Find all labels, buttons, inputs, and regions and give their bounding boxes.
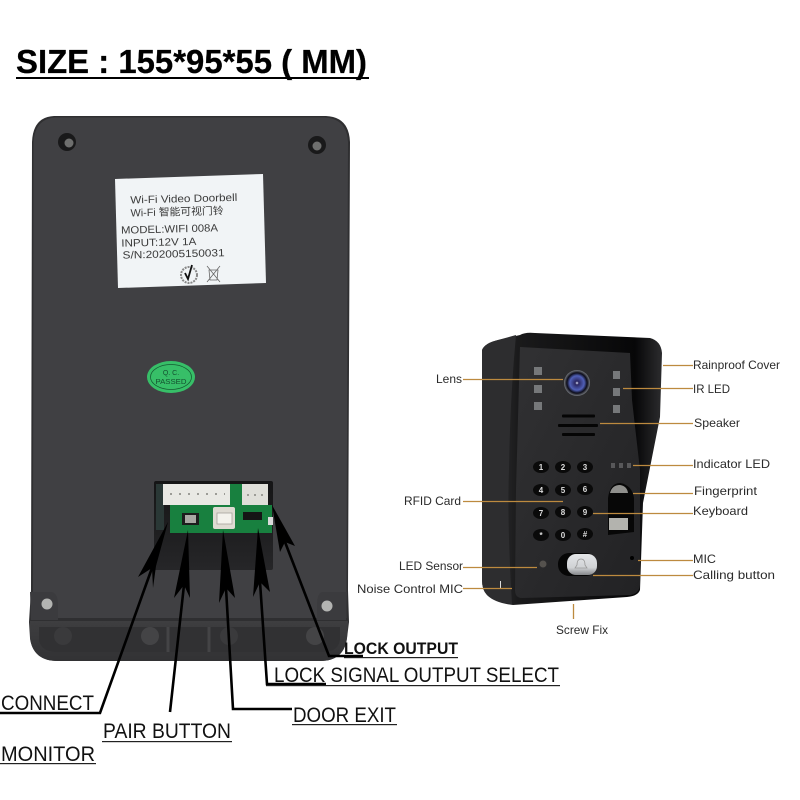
callout: pair button bbox=[102, 530, 232, 743]
QC passed sticker: PASSED bbox=[156, 379, 186, 386]
circuit board bbox=[170, 484, 272, 533]
LEDs right bbox=[613, 371, 620, 413]
leader lines and labels: left: Lens bbox=[436, 372, 462, 386]
callout: door exit bbox=[219, 530, 397, 727]
leader lines and labels: right: Speaker bbox=[694, 416, 740, 430]
microphone hole bbox=[630, 556, 634, 560]
keypad: 0 bbox=[561, 531, 566, 540]
leader lines and labels: right: IR LED bbox=[693, 382, 730, 396]
leader line and label: screw fix bbox=[556, 604, 608, 637]
leader lines and labels: right: Keyboard bbox=[693, 504, 748, 518]
callout: lock output: LOCK OUTPUT bbox=[344, 639, 459, 658]
leader lines and labels: right: MIC bbox=[693, 552, 716, 566]
title: SIZE : 155*95*55 ( MM) bbox=[16, 43, 367, 80]
callout: pair button: PAIR BUTTON bbox=[103, 720, 231, 743]
QC passed sticker: Q. C. bbox=[163, 370, 179, 377]
leader lines and labels: right bbox=[593, 358, 780, 582]
product label sticker: MODEL:WIFI 008A bbox=[121, 222, 218, 237]
keypad: 9 bbox=[583, 508, 588, 517]
icon: screw top left bbox=[58, 133, 76, 151]
indicator LEDs bbox=[611, 463, 631, 468]
keypad bbox=[533, 461, 593, 541]
LEDs left bbox=[534, 367, 542, 410]
callout: lock signal output select bbox=[253, 528, 560, 687]
leader line and label: screw fix: Screw Fix bbox=[556, 623, 608, 637]
lens bbox=[564, 370, 590, 396]
lower ledge bbox=[30, 621, 348, 661]
leader lines and labels: left bbox=[357, 372, 563, 596]
panel: doorbell back view bbox=[0, 116, 780, 766]
callout: monitor: MONITOR bbox=[1, 743, 95, 766]
leader lines and labels: right: Indicator LED bbox=[693, 457, 770, 471]
icon: screw top right bbox=[308, 136, 326, 154]
product label sticker: INPUT:12V 1A bbox=[121, 236, 196, 250]
rain hood bbox=[482, 333, 662, 605]
connector: six-pin white bbox=[163, 484, 230, 505]
keypad: 5 bbox=[561, 486, 566, 495]
keypad: * bbox=[539, 531, 543, 540]
speaker slots bbox=[558, 414, 598, 436]
keypad: # bbox=[583, 530, 588, 539]
product label sticker bbox=[115, 174, 266, 288]
icon: screw bottom right bbox=[317, 592, 347, 620]
leader lines and labels: right: Fingerprint bbox=[694, 484, 758, 498]
pair button bbox=[182, 513, 199, 525]
callout: lock output bbox=[272, 505, 459, 658]
callout: connect: CONNECT bbox=[1, 692, 94, 715]
leader lines and labels: left: LED Sensor bbox=[399, 559, 463, 573]
faceplate bbox=[515, 347, 640, 598]
fingerprint reader bbox=[608, 483, 634, 535]
callout: door exit: DOOR EXIT bbox=[293, 704, 396, 727]
leader lines and labels: left: Noise Control MIC bbox=[357, 582, 463, 596]
QC passed sticker bbox=[147, 361, 195, 393]
callout: lock signal output select: LOCK SIGNAL OUTPUT SELECT bbox=[274, 664, 559, 687]
keypad: 6 bbox=[583, 485, 588, 494]
keypad: 2 bbox=[561, 463, 566, 472]
connector: right white bbox=[242, 484, 268, 505]
keypad: 7 bbox=[539, 509, 544, 518]
product label sticker: Wi-Fi Video Doorbell bbox=[130, 192, 237, 206]
leader lines and labels: right: Calling button bbox=[693, 568, 775, 582]
keypad: 3 bbox=[583, 463, 588, 472]
jumper bbox=[243, 512, 262, 520]
calling button bbox=[558, 553, 597, 576]
keypad: 1 bbox=[539, 463, 544, 472]
leader lines and labels: left: RFID Card bbox=[404, 494, 461, 508]
keypad: 4 bbox=[539, 486, 544, 495]
panel: doorbell front view bbox=[482, 333, 662, 605]
keypad: 8 bbox=[561, 508, 566, 517]
callout: connect bbox=[0, 522, 168, 715]
icon: screw bottom left bbox=[30, 592, 58, 620]
connector window bbox=[154, 481, 273, 570]
leader lines and labels: right: Rainproof Cover bbox=[693, 358, 780, 372]
product label sticker: S/N:202005150031 bbox=[122, 247, 225, 262]
LED sensor bbox=[540, 560, 546, 568]
connector: door exit bbox=[213, 507, 235, 529]
product label sticker: Wi-Fi 智能可视门铃 bbox=[130, 204, 224, 219]
